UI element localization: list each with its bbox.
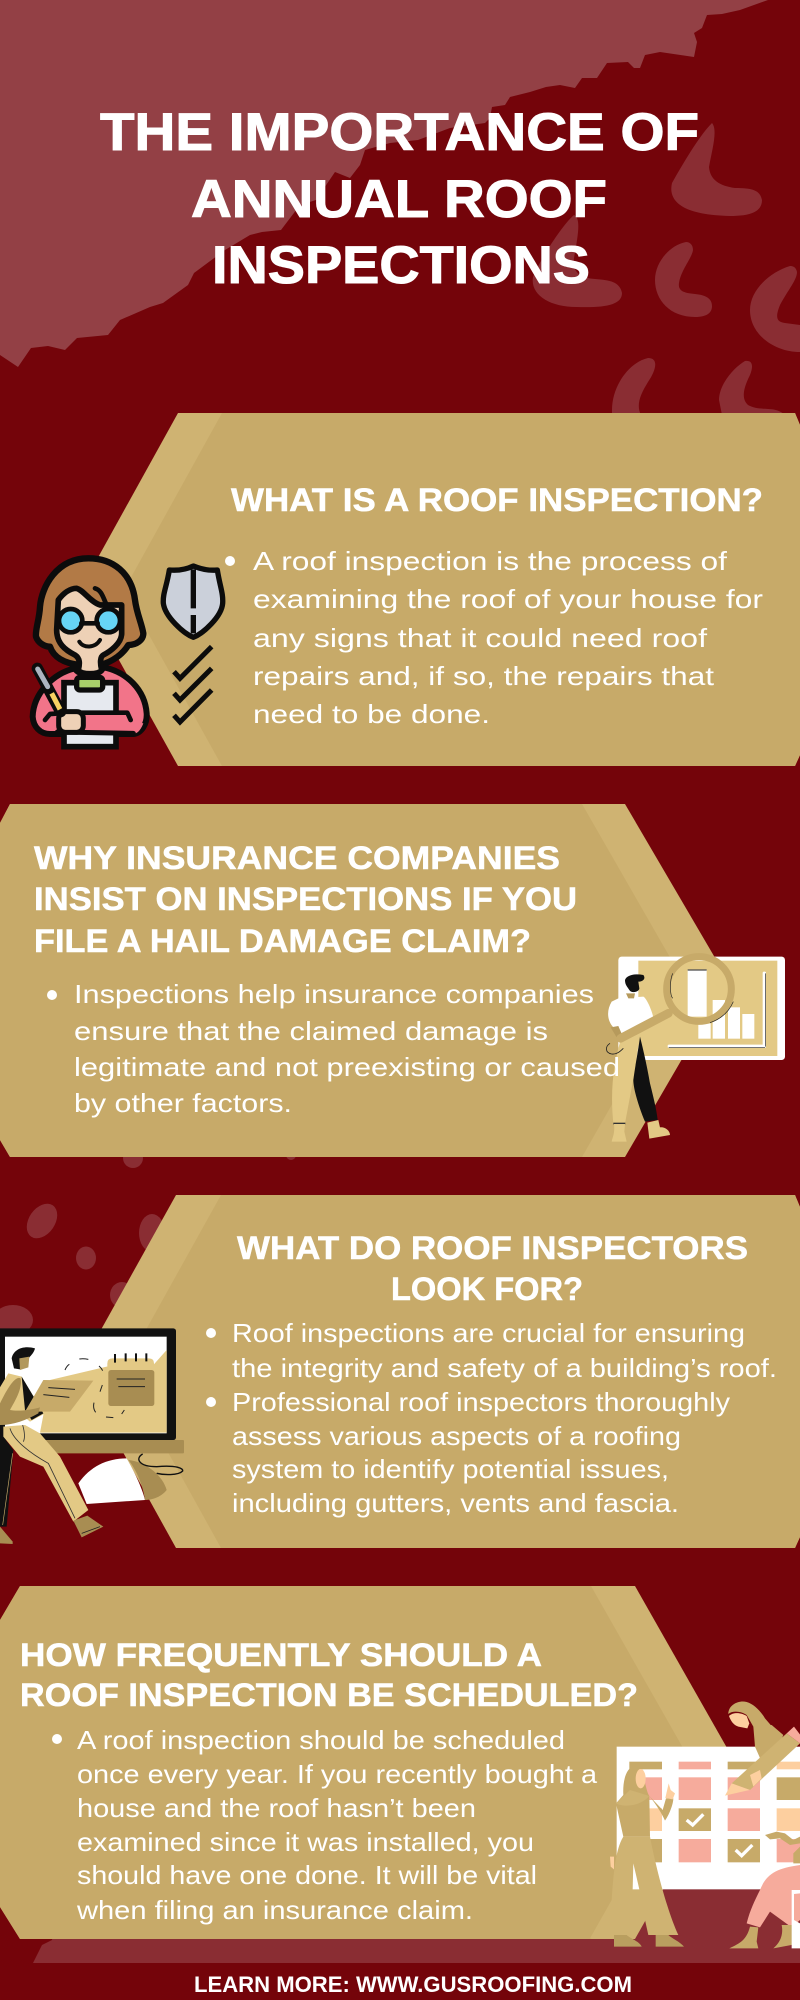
heading: what is a roof inspection: WHAT IS A ROOF INSPECTION?	[231, 482, 763, 518]
illustration: man with magnifier and bar chart	[606, 957, 785, 1142]
text block: why insurance companies insist: by other factors.	[74, 1088, 292, 1118]
icon: shield with exclamation mark	[163, 566, 223, 637]
text block: what do roof inspectors look for: the integrity and safety of a building’s roof.	[232, 1353, 777, 1383]
heading: how frequently should inspection be scheduled: ROOF INSPECTION BE SCHEDULED?	[20, 1677, 638, 1713]
title: ANNUAL ROOF	[191, 170, 607, 229]
text block: how frequently should inspection be scheduled: A roof inspection should be scheduled	[77, 1725, 565, 1755]
text block: how frequently should inspection be scheduled: when filing an insurance claim.	[76, 1895, 473, 1925]
text block: how frequently should inspection be scheduled: examined since it was installed, you	[77, 1827, 534, 1857]
heading: why insurance companies insist: WHY INSURANCE COMPANIES	[34, 840, 560, 876]
text block: what do roof inspectors look for: assess various aspects of a roofing	[232, 1421, 681, 1451]
text block: what do roof inspectors look for: including gutters, vents and fascia.	[232, 1488, 679, 1518]
text block: what is a roof inspection	[225, 546, 763, 729]
panel: what is a roof inspection	[80, 413, 800, 766]
heading: what do roof inspectors look for: WHAT DO ROOF INSPECTORS	[237, 1230, 748, 1266]
icon: three check marks	[174, 647, 212, 722]
icon: inspector woman with clipboard	[33, 558, 147, 747]
heading: how frequently should inspection be scheduled: HOW FREQUENTLY SHOULD A	[20, 1637, 542, 1673]
text block: why insurance companies insist	[47, 979, 620, 1118]
heading: what do roof inspectors look for	[237, 1230, 748, 1307]
title	[100, 103, 699, 295]
title: INSPECTIONS	[212, 236, 590, 295]
torn paper background shape	[0, 0, 768, 367]
heading: why insurance companies insist: INSIST ON INSPECTIONS IF YOU	[34, 881, 577, 917]
text block: how frequently should inspection be scheduled	[52, 1725, 598, 1925]
text block: what do roof inspectors look for	[206, 1318, 777, 1518]
text block: how frequently should inspection be scheduled: house and the roof hasn’t been	[77, 1793, 476, 1823]
text block: how frequently should inspection be scheduled: once every year. If you recently bought a	[77, 1759, 598, 1789]
decorative blobs mid page	[0, 1148, 296, 1335]
text block: what is a roof inspection: need to be done.	[253, 699, 490, 729]
illustration: person at monitor with calendar	[0, 1328, 184, 1544]
text block: what do roof inspectors look for: Roof inspections are crucial for ensuring	[232, 1318, 745, 1348]
text block: what is a roof inspection: any signs that it could need roof	[253, 623, 708, 653]
text block: what do roof inspectors look for: Professional roof inspectors thoroughly	[232, 1387, 730, 1417]
heading: how frequently should inspection be scheduled	[20, 1637, 638, 1713]
panel: why insurance companies insist	[0, 804, 728, 1157]
heading: what do roof inspectors look for: LOOK FOR?	[391, 1271, 583, 1307]
text block: what is a roof inspection: examining the roof of your house for	[253, 584, 763, 614]
bottom ground band	[33, 1889, 800, 1963]
text block: how frequently should inspection be scheduled: should have one done. It will be vital	[77, 1860, 537, 1890]
decorative blobs top right	[533, 123, 800, 415]
title: THE IMPORTANCE OF	[100, 103, 699, 162]
text block: why insurance companies insist: legitimate and not preexisting or caused	[74, 1052, 620, 1082]
panel: what do roof inspectors look for	[78, 1195, 800, 1548]
text block: what do roof inspectors look for: system to identify potential issues,	[232, 1454, 669, 1484]
text block: why insurance companies insist: ensure that the claimed damage is	[74, 1016, 548, 1046]
heading: why insurance companies insist: FILE A HAIL DAMAGE CLAIM?	[34, 923, 531, 959]
text block: what is a roof inspection: repairs and, if so, the repairs that	[253, 661, 715, 691]
heading: why insurance companies insist	[34, 840, 577, 959]
illustration: team planning on a calendar	[590, 1702, 800, 1948]
text block: what is a roof inspection: A roof inspection is the process of	[253, 546, 728, 576]
footer: learn more link: LEARN MORE: WWW.GUSROOFING.COM	[194, 1972, 632, 1997]
panel: how frequently should inspection be scheduled	[0, 1586, 735, 1939]
text block: why insurance companies insist: Inspections help insurance companies	[74, 979, 594, 1009]
